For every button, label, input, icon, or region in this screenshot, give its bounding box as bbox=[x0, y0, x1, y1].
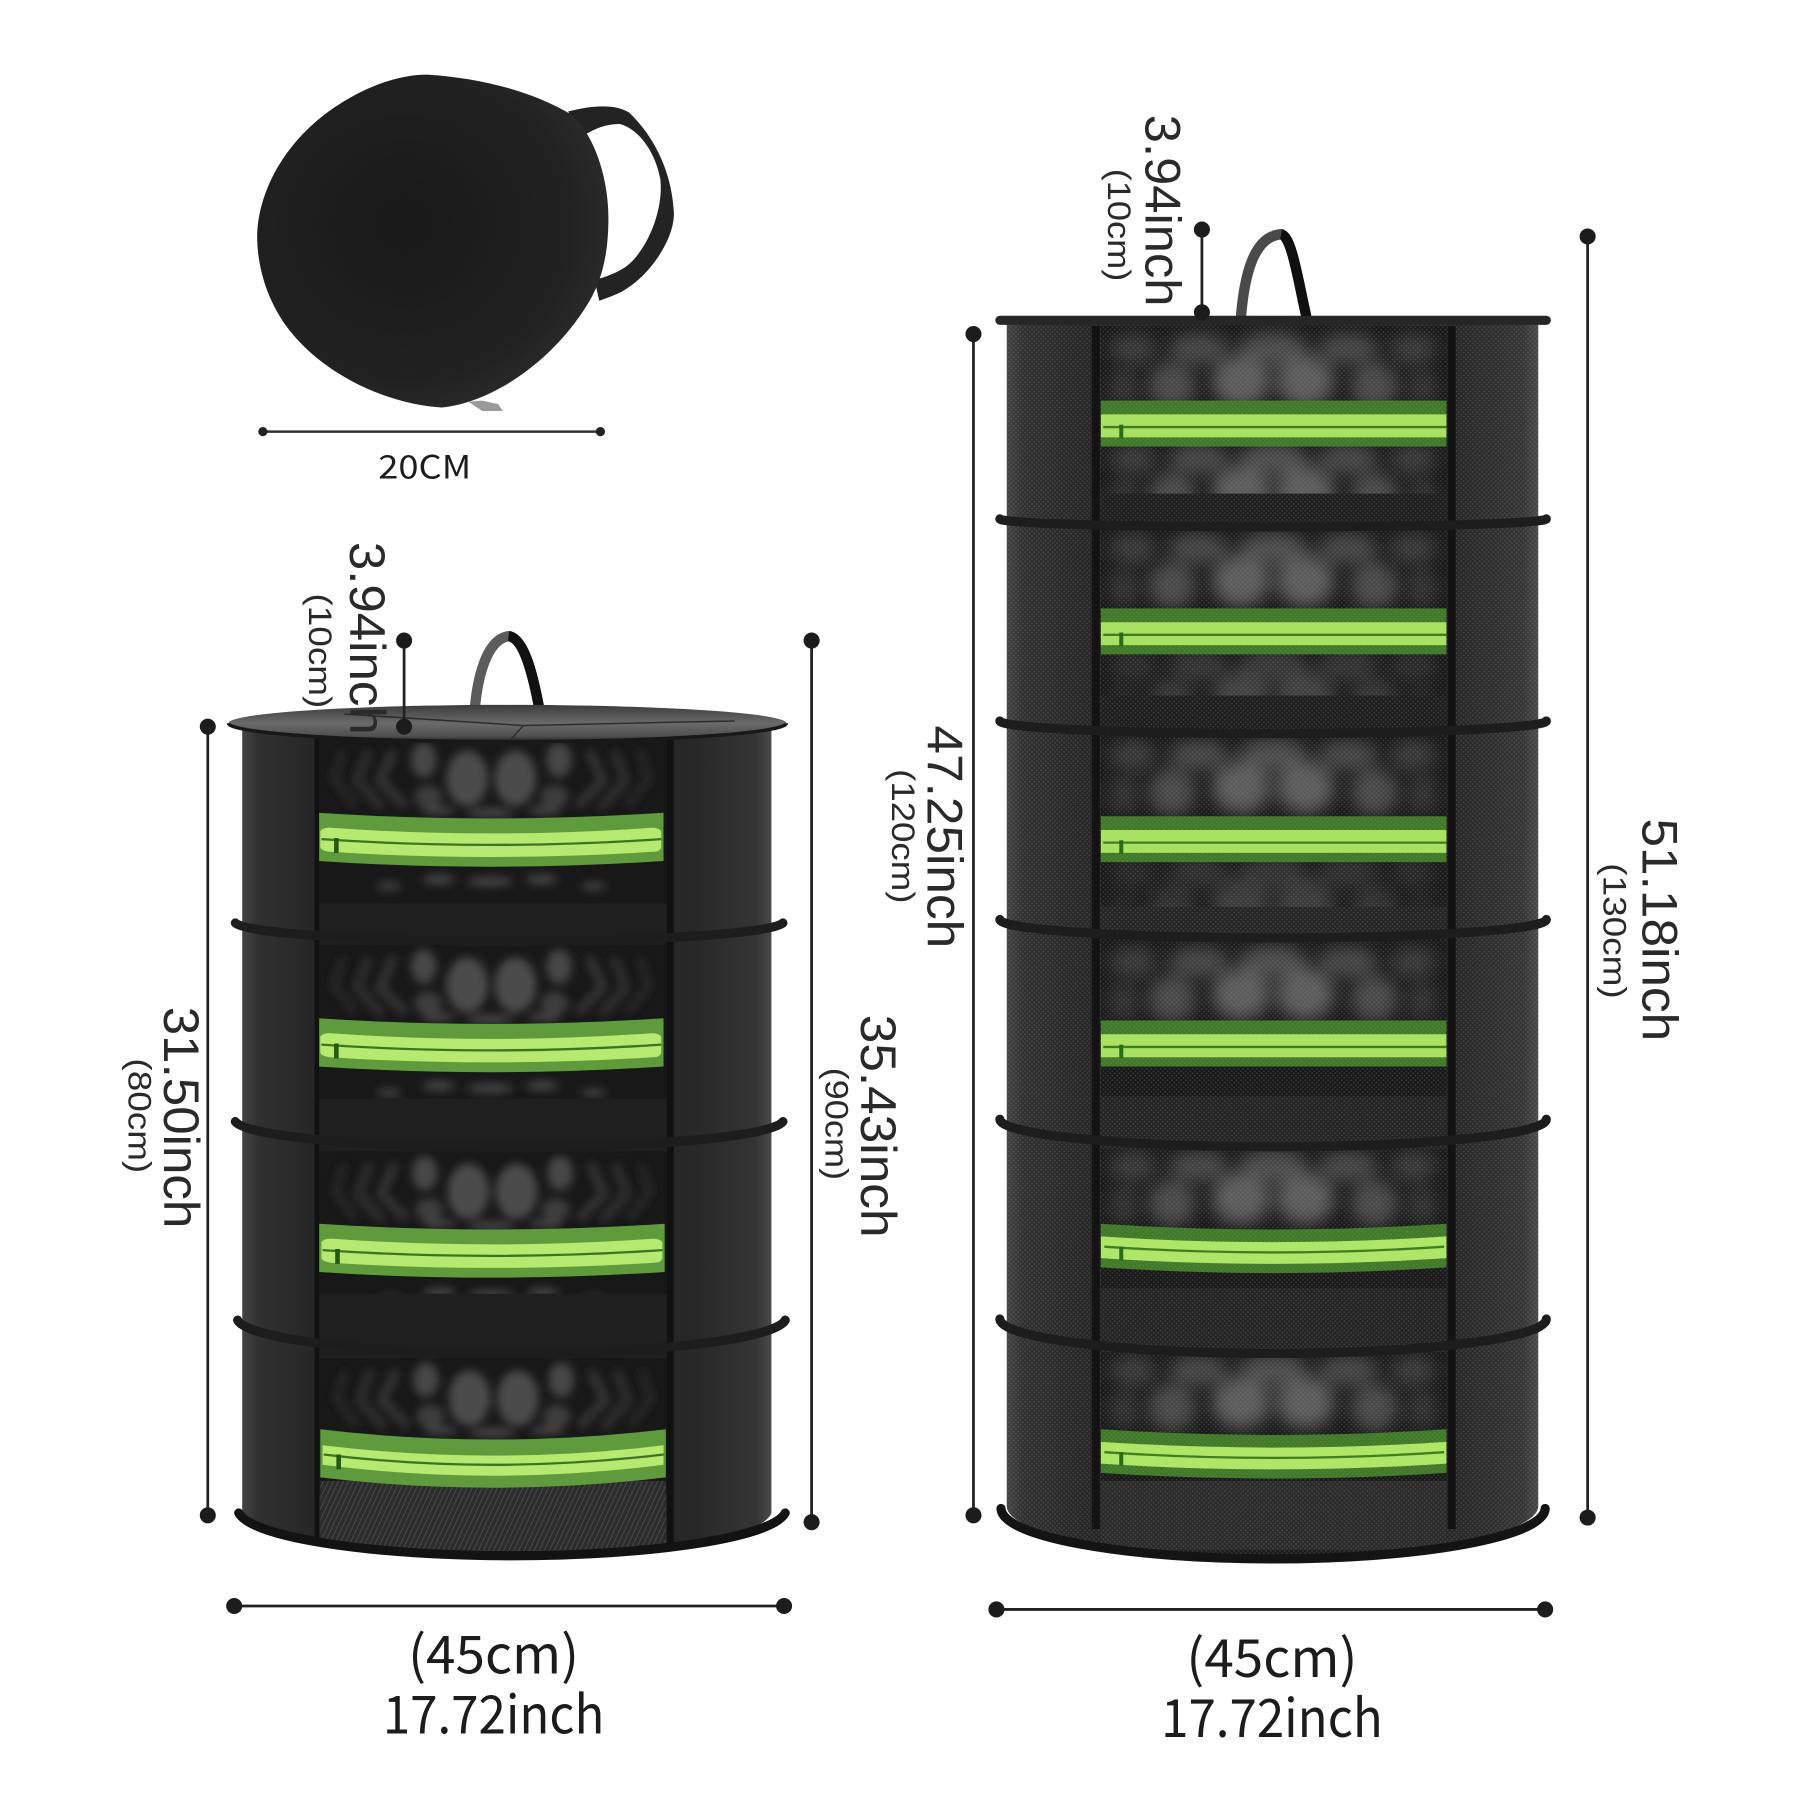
handle bbox=[474, 636, 541, 719]
shelf band 3 bbox=[318, 1294, 667, 1358]
vertical straps bbox=[315, 737, 674, 1547]
left rack handle height bbox=[396, 633, 412, 735]
label: left height cm: (80cm) bbox=[122, 1058, 158, 1173]
center panel bbox=[318, 737, 667, 1495]
label: right handle inch: 3.94inch bbox=[1135, 115, 1192, 307]
zipper tier 1 bbox=[318, 813, 664, 867]
right rack height 120cm bbox=[965, 326, 982, 1523]
zipper tier 3 bbox=[1101, 816, 1446, 862]
bottom mesh panel bbox=[320, 1481, 666, 1558]
icon: round bag bbox=[257, 75, 608, 408]
ring 1 bbox=[1000, 519, 1546, 527]
shelf band 5 bbox=[1101, 1288, 1446, 1352]
moire tier 1 bbox=[334, 743, 649, 891]
zipper tier 5 bbox=[1101, 1224, 1446, 1273]
icon: bag handle bbox=[568, 106, 674, 301]
moire tier 2 bbox=[1110, 533, 1436, 608]
moire tier 1 bbox=[1110, 333, 1436, 409]
label: left total cm: (90cm) bbox=[818, 1068, 854, 1180]
ring 4 bbox=[1000, 1119, 1546, 1147]
zipper tier 6 bbox=[1101, 1429, 1446, 1479]
ring 3 bbox=[1000, 920, 1546, 938]
base ring bbox=[239, 1513, 785, 1556]
shelf band 3 bbox=[1101, 907, 1446, 939]
label: left width cm: (45cm) bbox=[408, 1614, 579, 1690]
label: left height inch: 31.50inch bbox=[153, 1007, 210, 1228]
lid bbox=[995, 316, 1551, 325]
zipper tier 2 bbox=[1101, 608, 1446, 654]
moire tier 6 bbox=[1110, 1355, 1436, 1430]
bottom mesh hatch bbox=[320, 1481, 666, 1558]
label: 20CM: 20CM bbox=[378, 443, 471, 489]
left rack width bbox=[226, 1598, 792, 1614]
handle bbox=[1241, 234, 1306, 317]
label: right height cm: (120cm) bbox=[885, 769, 921, 903]
icon: zip pull bbox=[468, 401, 503, 411]
ring 1 bbox=[235, 923, 783, 941]
cylinder body bbox=[242, 726, 771, 1558]
shelf band 2 bbox=[318, 1099, 667, 1151]
label: right width inch: 17.72inch bbox=[1161, 1677, 1383, 1753]
cylinder body bbox=[1007, 319, 1538, 1557]
shelf band 2 bbox=[1101, 696, 1446, 730]
zipper tier 4 bbox=[320, 1429, 666, 1488]
vertical straps bbox=[1092, 326, 1456, 1529]
shelf band 1 bbox=[318, 903, 667, 945]
right rack handle height bbox=[1194, 222, 1210, 320]
right rack width bbox=[988, 1601, 1553, 1617]
label: right height inch: 47.25inch bbox=[917, 726, 974, 948]
label: right total inch: 51.18inch bbox=[1632, 818, 1689, 1041]
moire tier 3 lower bbox=[1110, 856, 1436, 932]
lid bbox=[228, 705, 786, 742]
ring 2 bbox=[1000, 721, 1546, 734]
moire tier 2 bbox=[334, 949, 649, 1097]
zipper tier 4 bbox=[1101, 1021, 1446, 1066]
shelf band 4 bbox=[1101, 1096, 1446, 1149]
label: left handle cm: (10cm) bbox=[302, 593, 338, 708]
dimension: bag width bbox=[258, 427, 605, 436]
zipper tier 1 bbox=[1101, 401, 1446, 447]
moire tier 3 bbox=[1110, 739, 1436, 815]
moire tier 3 bbox=[335, 1156, 650, 1304]
dimension lines bbox=[200, 222, 1596, 1617]
ring 2 bbox=[235, 1122, 783, 1147]
label: left handle inch: 3.94inch bbox=[339, 542, 396, 735]
moire tier 5 bbox=[1110, 1150, 1436, 1226]
mesh overlay bbox=[1007, 319, 1538, 1557]
left four-tier rack bbox=[228, 636, 786, 1558]
moire tier 4 bbox=[336, 1363, 651, 1511]
bottom panel bbox=[1101, 1481, 1446, 1550]
zipper tier 3 bbox=[319, 1224, 665, 1278]
moire tier 4 bbox=[1110, 946, 1436, 1022]
shelf band 1 bbox=[1101, 494, 1446, 523]
left rack height 90cm bbox=[804, 633, 820, 1530]
label: right width cm: (45cm) bbox=[1186, 1617, 1357, 1693]
ring 3 bbox=[238, 1320, 785, 1353]
ring 5 bbox=[1000, 1319, 1546, 1353]
label: left width inch: 17.72inch bbox=[383, 1673, 604, 1749]
label: right handle cm: (10cm) bbox=[1101, 169, 1137, 281]
storage bag bbox=[257, 75, 674, 411]
moire tier 1 lower bbox=[1110, 443, 1436, 519]
left rack height 80cm bbox=[200, 719, 216, 1523]
zipper tier 2 bbox=[318, 1018, 664, 1072]
center panel bbox=[1101, 326, 1446, 1543]
right rack height 130cm bbox=[1580, 228, 1596, 1526]
right six-tier rack bbox=[995, 234, 1551, 1559]
label: right total cm: (130cm) bbox=[1597, 863, 1633, 999]
label: left total inch: 35.43inch bbox=[850, 1015, 907, 1238]
base ring bbox=[1001, 1508, 1545, 1559]
moire tier 2 lower bbox=[1110, 650, 1436, 726]
